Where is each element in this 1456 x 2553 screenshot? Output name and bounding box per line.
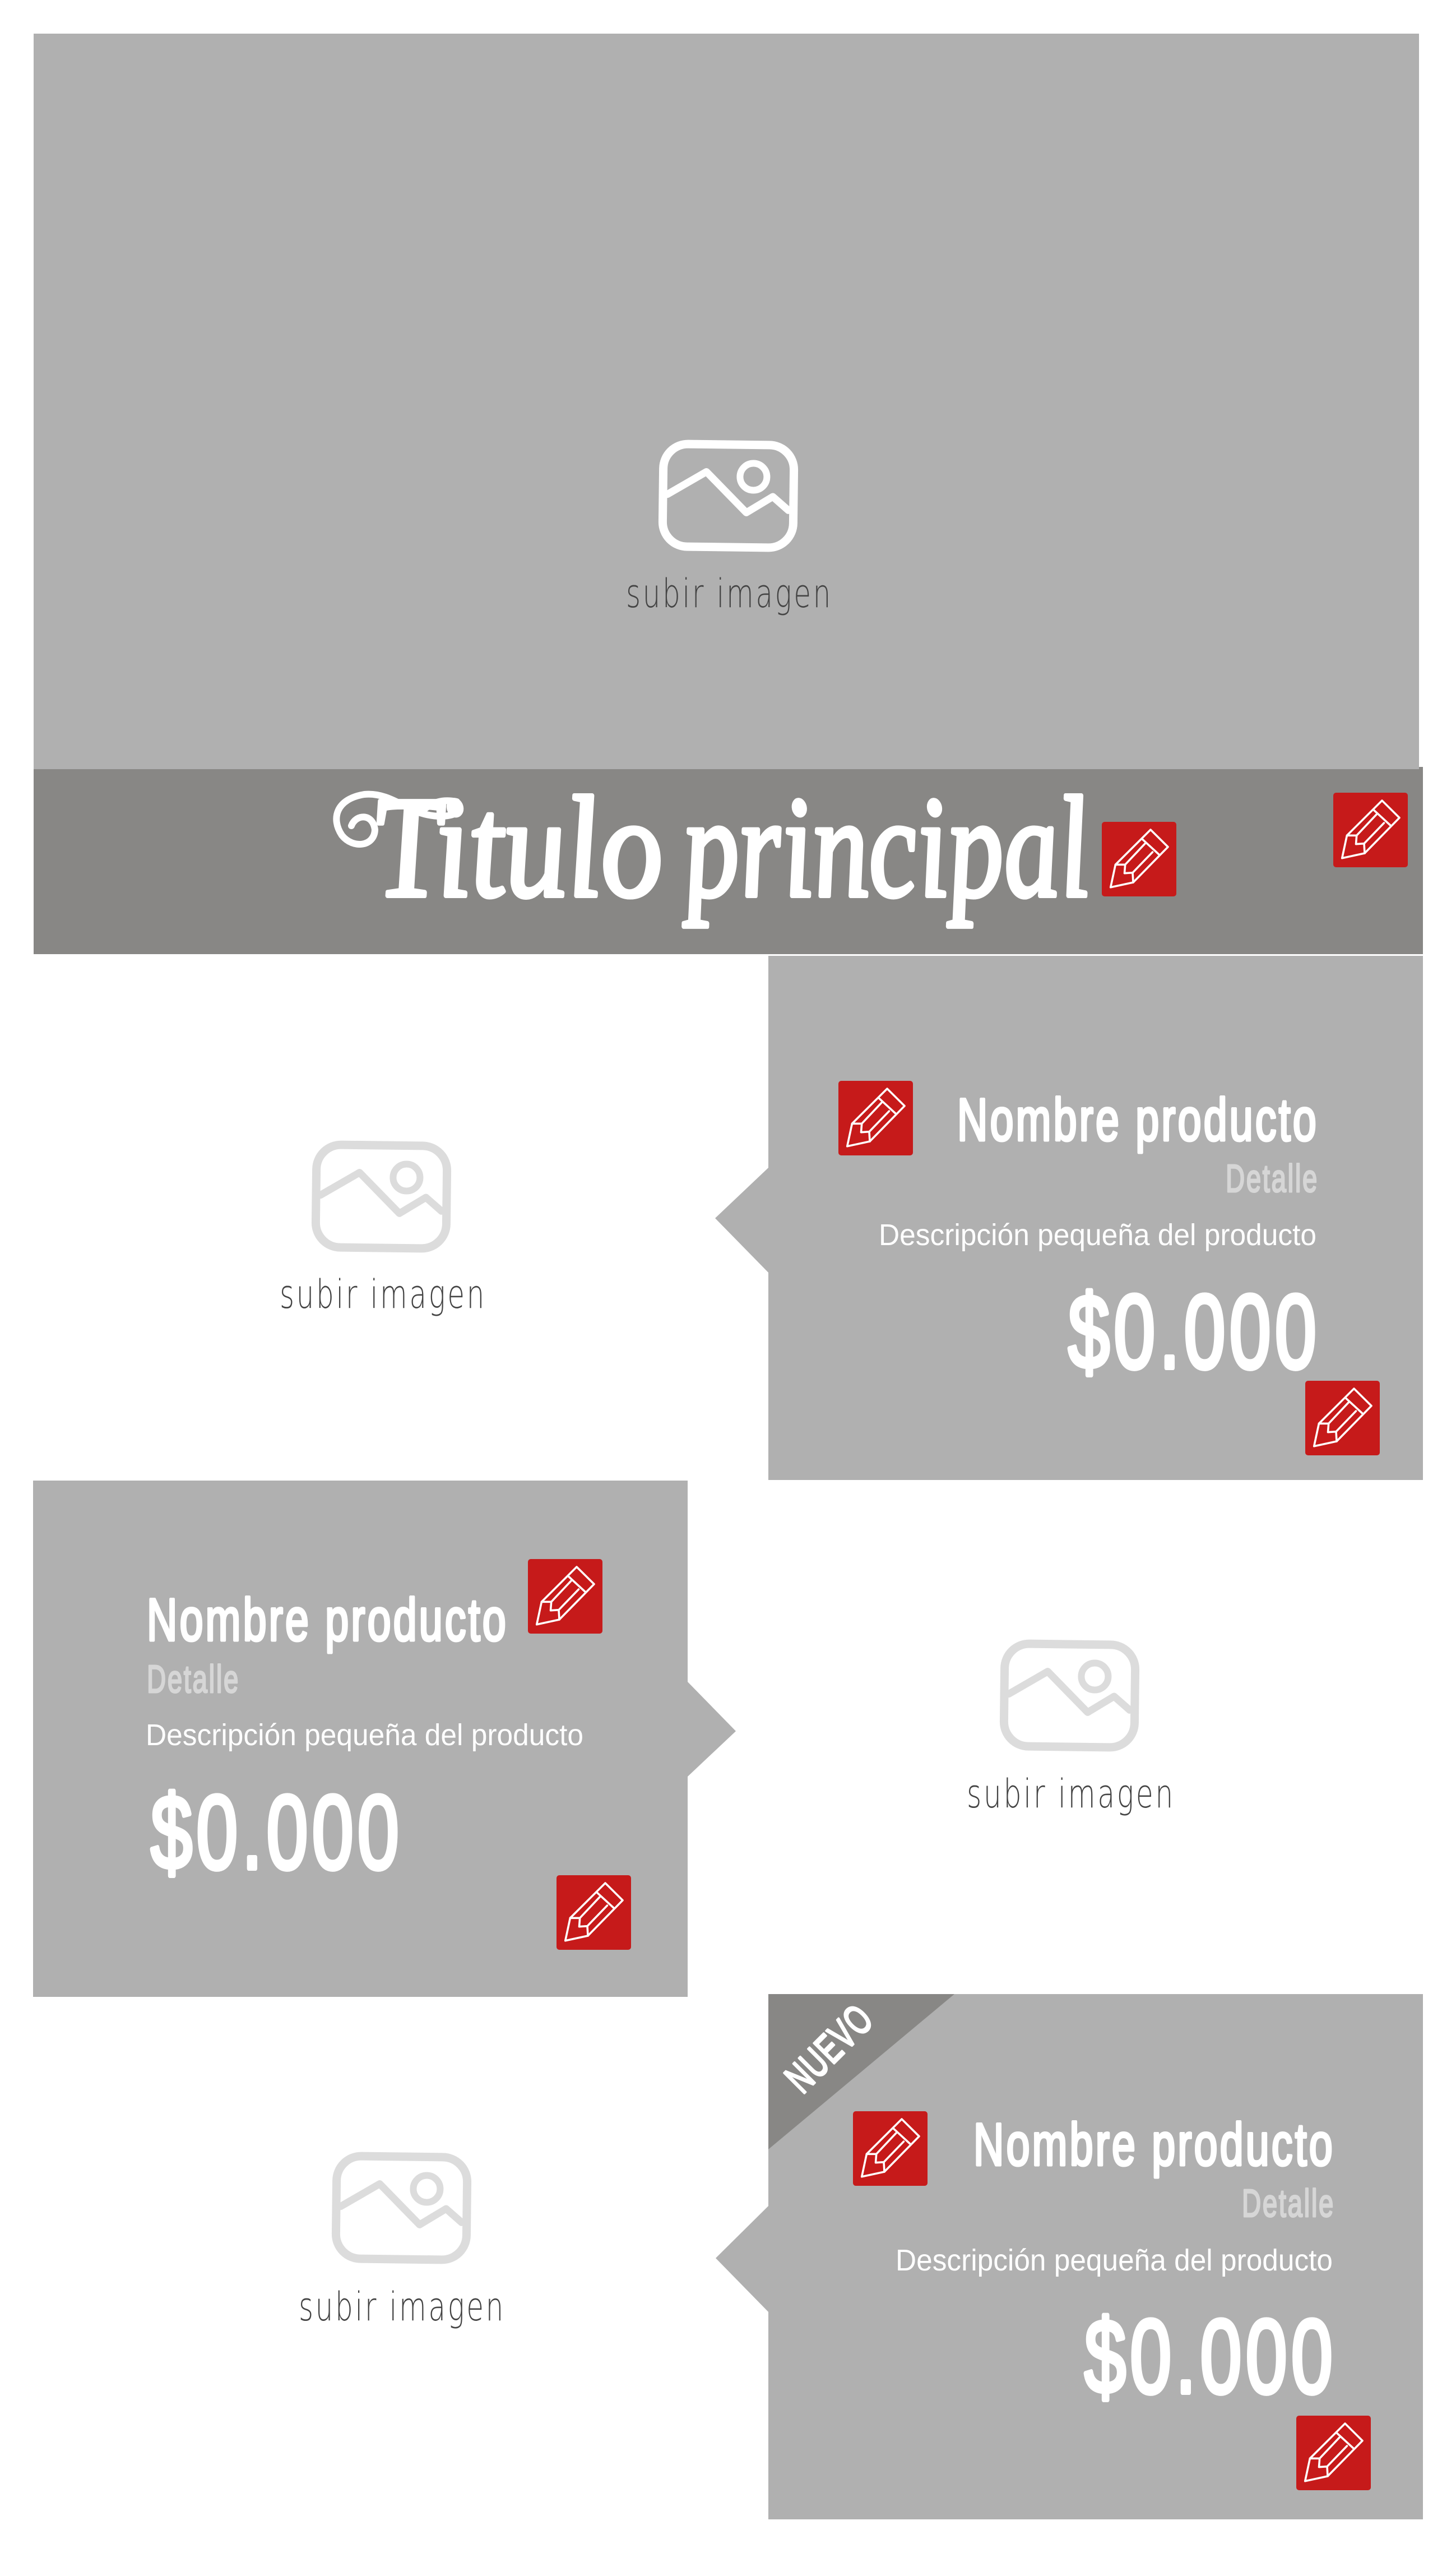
product price: $0.000 — [1084, 2298, 1337, 2415]
product name: Nombre producto — [957, 1086, 1319, 1153]
edit icon: product 3 name — [853, 2111, 928, 2186]
title text: Titulo — [365, 767, 669, 927]
product price: $0.000 — [151, 1774, 403, 1891]
product description: Descripción pequeña del producto — [879, 1218, 1316, 1252]
new ribbon — [768, 1994, 954, 2149]
hero image placeholder — [34, 34, 1419, 769]
product detail: Detalle — [1226, 1157, 1319, 1200]
upload label: subir imagen — [967, 1771, 1175, 1817]
edit icon: banner corner — [1333, 793, 1408, 867]
icon: image — [316, 1145, 447, 1248]
edit icon: title — [1102, 822, 1176, 896]
icon: image — [1004, 1644, 1135, 1747]
product 2 image placeholder — [967, 1644, 1175, 1817]
upload label: subir imagen — [626, 571, 833, 617]
product detail: Detalle — [1242, 2181, 1335, 2225]
product description: Descripción pequeña del producto — [896, 2244, 1333, 2277]
ribbon label: NUEVO — [776, 1995, 882, 2101]
panel: product 3 — [716, 1994, 1423, 2519]
title banner — [34, 767, 1423, 954]
edit icon: product 2 price — [557, 1875, 631, 1950]
product 1 image placeholder — [280, 1145, 486, 1317]
edit icon: product 1 name — [838, 1081, 913, 1155]
product detail: Detalle — [147, 1657, 240, 1701]
panel: product 1 — [715, 956, 1423, 1480]
product 3 image placeholder — [299, 2156, 506, 2330]
title text — [336, 767, 1096, 927]
product description: Descripción pequeña del producto — [146, 1718, 583, 1752]
product name: Nombre producto — [147, 1586, 508, 1653]
edit icon: product 2 name — [528, 1559, 602, 1634]
title text: principal — [669, 767, 1096, 927]
product price: $0.000 — [1068, 1273, 1320, 1390]
icon: image — [336, 2156, 467, 2260]
panel: product 2 — [33, 1481, 736, 1997]
edit icon: product 3 price — [1296, 2416, 1371, 2490]
icon: image — [662, 444, 794, 548]
edit icon: product 1 price — [1305, 1381, 1380, 1455]
upload label: subir imagen — [299, 2284, 506, 2330]
upload label: subir imagen — [280, 1271, 486, 1317]
